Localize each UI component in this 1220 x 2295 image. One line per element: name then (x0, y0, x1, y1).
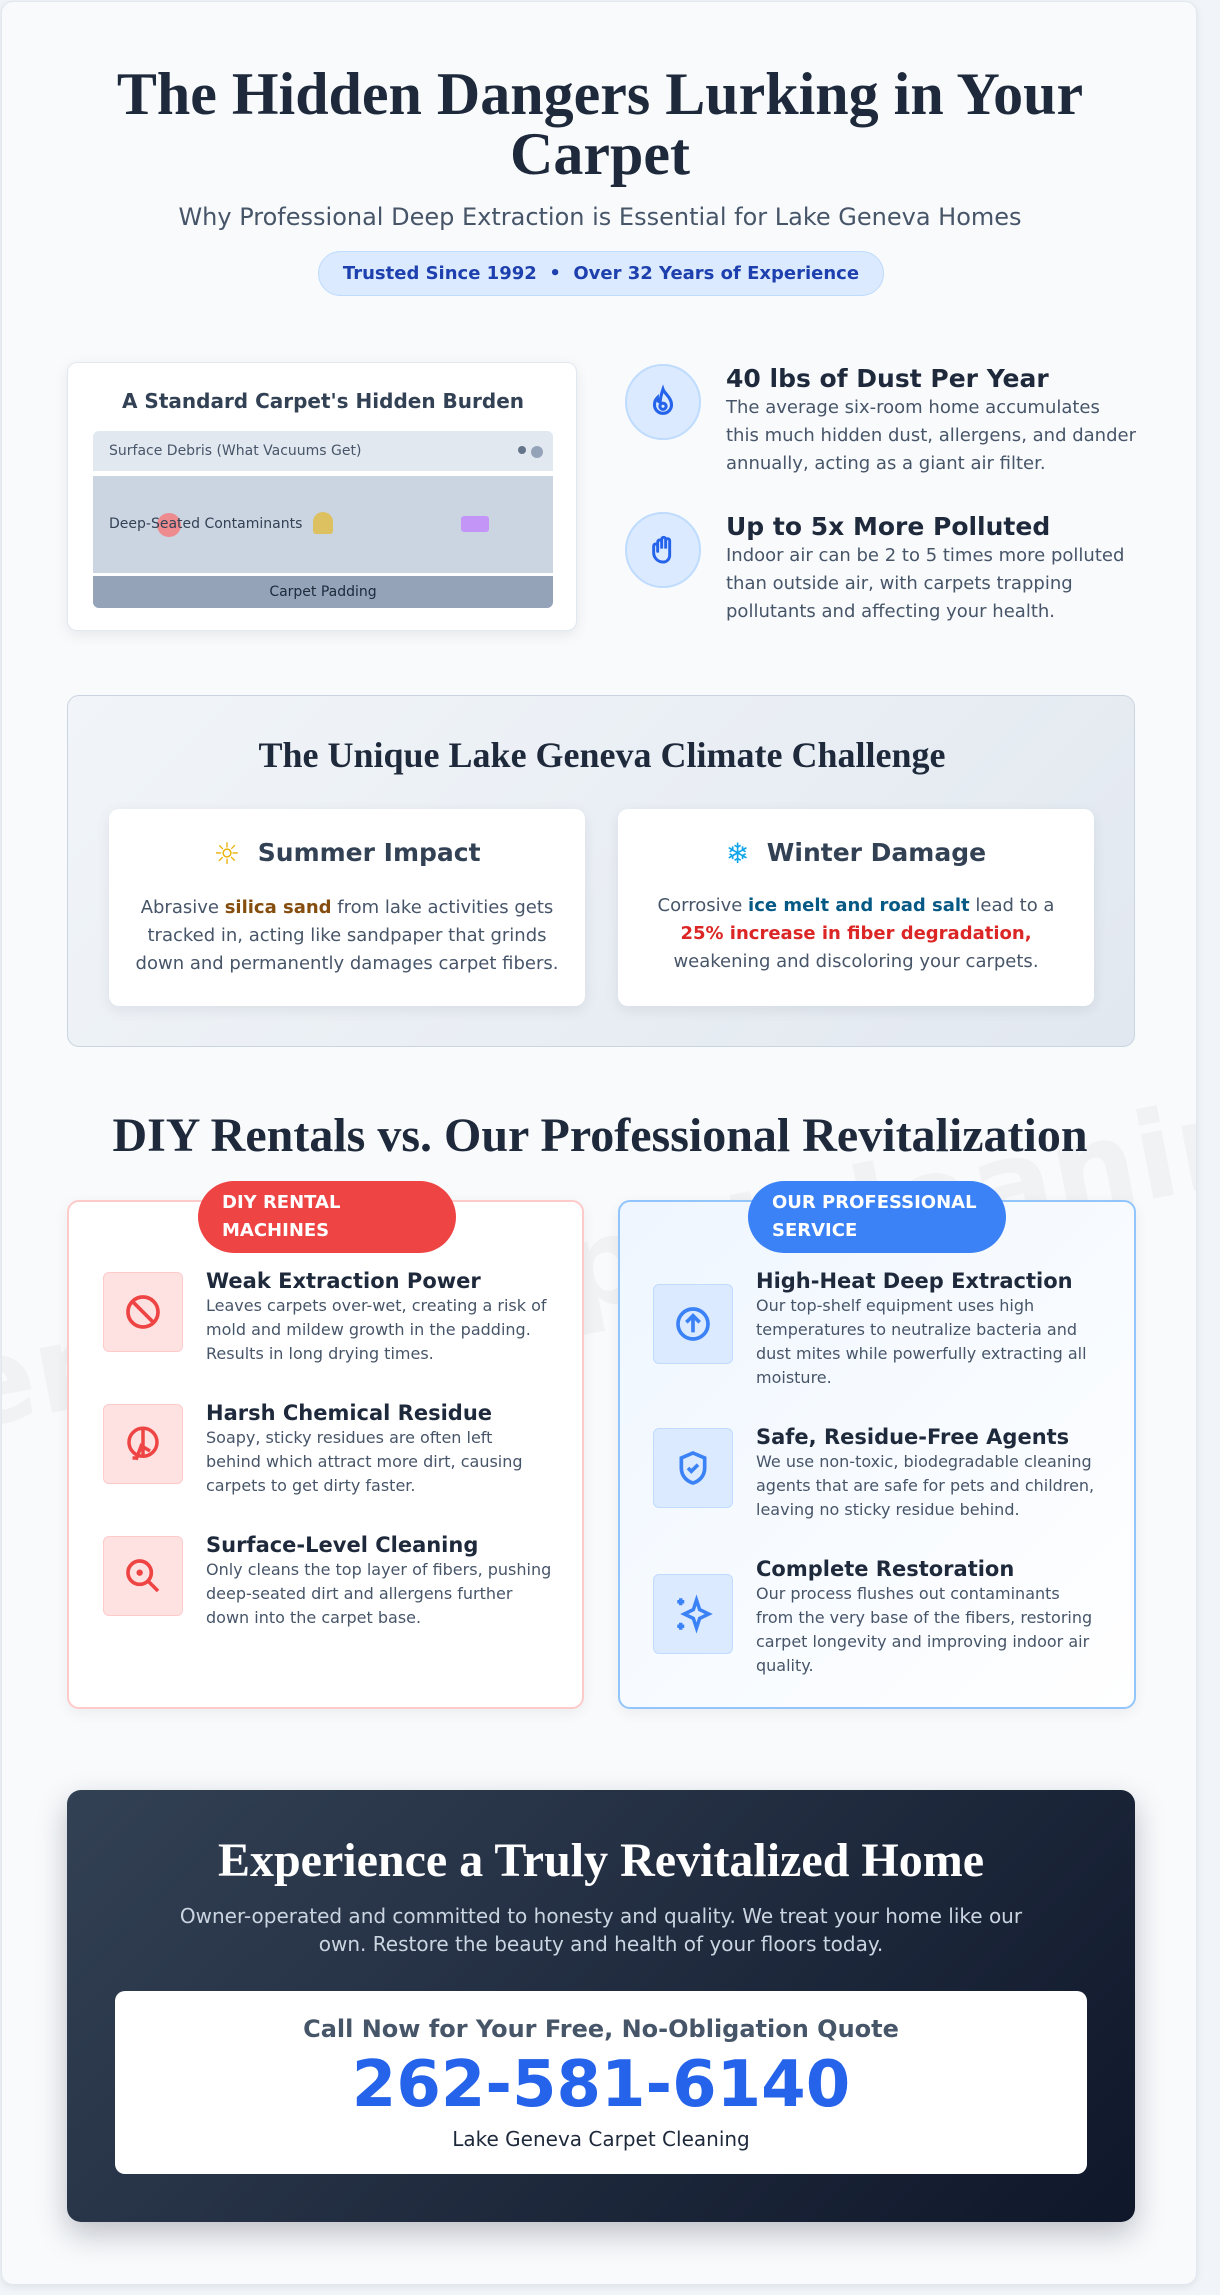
DIY item 2: Soapy, sticky residues are often left behind which attract more dirt, causing carpets to get dirty faster. (206, 1428, 523, 1495)
title: The Hidden Dangers Lurking in Your Carpet (117, 61, 1083, 187)
stat: polluted (625, 512, 1124, 622)
burden heading: A Standard Carpet's Hidden Burden (122, 389, 524, 413)
stat text: The average six-room home accumulates this much hidden dust, allergens, and dander annually, acting as a giant air filter. (726, 397, 1136, 474)
icon: shield (653, 1428, 733, 1508)
DIY item 3 (103, 1533, 551, 1627)
panel: professional (618, 1200, 1136, 1709)
pro item 1 (653, 1269, 1087, 1387)
icon: ban (103, 1272, 183, 1352)
card: summer (109, 809, 585, 1006)
phone number: 262-581-6140 (352, 2048, 850, 2122)
layer: deep contaminants: Deep-Seated Contaminants (109, 516, 302, 532)
pro item 2: We use non-toxic, biodegradable cleaning agents that are safe for pets and children, leaving no sticky residue behind. (756, 1452, 1094, 1519)
icon: search (103, 1536, 183, 1616)
pro item 3 (653, 1557, 1092, 1675)
layer: surface: Surface Debris (What Vacuums Get) (109, 443, 361, 459)
icon: flame (625, 364, 701, 440)
CTA text: Owner-operated and committed to honesty and quality. We treat your home like our own. Restore the beauty and health of your floors today. (180, 1904, 1022, 1956)
quote box (115, 1991, 1087, 2174)
stat text (726, 364, 1136, 474)
panel: CTA (67, 1790, 1135, 2222)
stat text: Indoor air can be 2 to 5 times more polluted than outside air, with carpets trapping pollutants and affecting your health. (726, 545, 1124, 622)
icon: arrow up (653, 1284, 733, 1364)
summer text: Abrasive silica sand from lake activities gets tracked in, acting like sandpaper that grinds down and permanently damages carpet fibers. (136, 897, 558, 974)
DIY item 1: Weak Extraction Power (206, 1269, 481, 1293)
stat: dust (625, 364, 1136, 474)
panel: carpet burden (67, 362, 577, 631)
pro item 3: Complete Restoration (756, 1557, 1014, 1581)
business name: Lake Geneva Carpet Cleaning (452, 2127, 750, 2151)
pill: professional: OUR PROFESSIONAL (772, 1192, 977, 1213)
climate heading: The Unique Lake Geneva Climate Challenge (258, 735, 946, 775)
badge: Trusted Since 1992 • Over 32 Years of Experience (343, 263, 859, 284)
pill: DIY (198, 1181, 456, 1253)
icon: chemical (103, 1404, 183, 1484)
pill: DIY: DIY RENTAL (222, 1192, 340, 1213)
layer: deep contaminants (93, 476, 553, 573)
layer: surface (93, 431, 553, 471)
DIY item 1 (103, 1269, 547, 1363)
pill: professional (748, 1181, 1006, 1253)
DIY item 3: Surface-Level Cleaning (206, 1533, 478, 1557)
layer: padding: Carpet Padding (269, 584, 377, 600)
pro item 3: Our process flushes out contaminants from the very base of the fibers, restoring carpet longevity and improving indoor air quality. (756, 1584, 1092, 1675)
pro item 2 (653, 1425, 1094, 1519)
stat text: Up to 5x More Polluted (726, 512, 1050, 541)
comparison heading: DIY Rentals vs. Our Professional Revitalization (112, 1109, 1088, 1162)
stat text: 40 lbs of Dust Per Year (726, 364, 1049, 393)
badge (318, 251, 884, 296)
pill: professional: SERVICE (772, 1220, 857, 1241)
DIY item 2: Harsh Chemical Residue (206, 1401, 492, 1425)
pro item 1: High-Heat Deep Extraction (756, 1269, 1073, 1293)
DIY item 2 (103, 1401, 523, 1495)
panel: climate challenge (67, 695, 1135, 1047)
icon: hand (625, 512, 701, 588)
DIY item 3: Only cleans the top layer of fibers, pushing deep-seated dirt and allergens further down into the carpet base. (206, 1560, 551, 1627)
summer heading: ☼ Summer Impact (213, 837, 481, 872)
call text: Call Now for Your Free, No-Obligation Quote (303, 2015, 899, 2043)
DIY item 1: Leaves carpets over-wet, creating a risk of mold and mildew growth in the padding. Results in long drying times. (206, 1296, 546, 1363)
subtitle: Why Professional Deep Extraction is Essential for Lake Geneva Homes (178, 203, 1022, 231)
pill: DIY: MACHINES (222, 1220, 329, 1241)
icon: sparkle (653, 1574, 733, 1654)
layer: padding (93, 576, 553, 608)
winter text: Corrosive ice melt and road salt lead to a 25% increase in fiber degradation, weakening and discoloring your carpets. (658, 895, 1054, 972)
winter heading: ❄ Winter Damage (726, 837, 986, 870)
pro item 1: Our top-shelf equipment uses high temperatures to neutralize bacteria and dust mites while powerfully extracting all moisture. (756, 1296, 1087, 1387)
panel: DIY (67, 1200, 584, 1709)
CTA heading: Experience a Truly Revitalized Home (218, 1834, 984, 1887)
card: winter (618, 809, 1094, 1006)
pro item 2: Safe, Residue-Free Agents (756, 1425, 1069, 1449)
